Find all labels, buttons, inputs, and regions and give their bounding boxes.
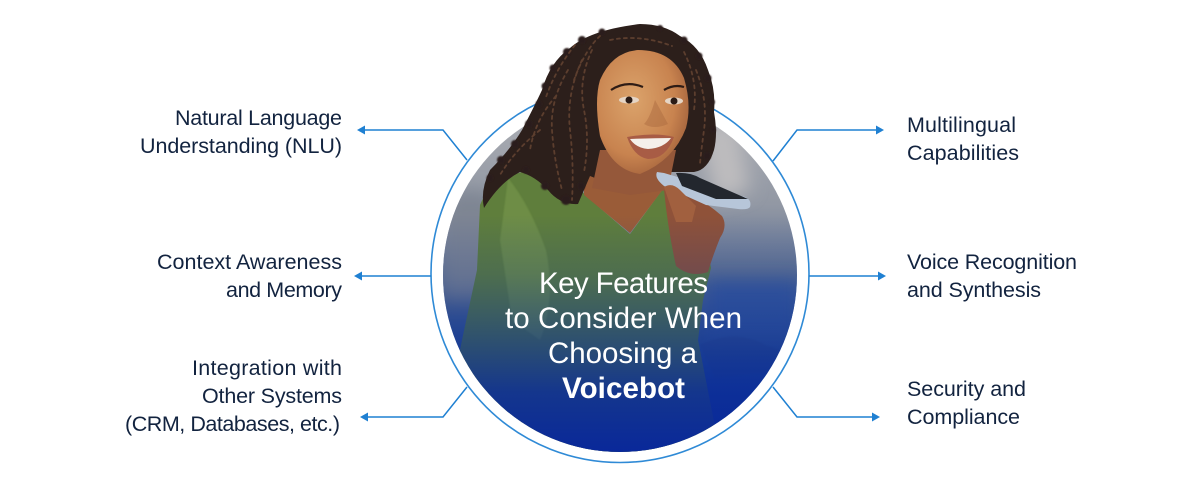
label: context awareness and memory <box>157 250 342 302</box>
connector arrow: voice recognition <box>809 272 886 280</box>
label: context awareness and memory: Context Awareness <box>157 250 342 274</box>
connector arrow: natural language understanding <box>357 126 467 160</box>
photo circle <box>443 126 797 452</box>
label: context awareness and memory: and Memory <box>226 278 342 302</box>
title: to Consider When <box>505 302 742 335</box>
title: Choosing a <box>548 337 698 370</box>
photo background <box>443 98 797 452</box>
phone <box>656 172 750 209</box>
green shirt <box>460 172 714 452</box>
resting hand <box>769 366 772 370</box>
raised hand <box>664 190 725 274</box>
title <box>505 267 742 405</box>
sofa shapes <box>440 120 800 340</box>
eyes <box>619 96 683 104</box>
label: multilingual capabilities: Multilingual <box>907 113 1016 137</box>
nose <box>644 100 668 127</box>
shirt shading <box>500 180 550 318</box>
label: security and compliance: Compliance <box>907 405 1020 429</box>
label: voice recognition and synthesis: and Synthesis <box>907 278 1041 302</box>
label: natural language understanding <box>140 106 342 158</box>
curly hair edge <box>486 25 716 205</box>
woman head and hair <box>483 24 750 222</box>
title: Voicebot <box>562 372 685 405</box>
eyebrows <box>611 84 684 90</box>
smile <box>627 134 674 159</box>
fingers <box>664 185 696 222</box>
label: security and compliance: Security and <box>907 377 1026 401</box>
label: security and compliance <box>907 377 1026 429</box>
label: voice recognition and synthesis <box>907 250 1077 302</box>
label: integration with other systems: Other Systems <box>202 384 342 408</box>
connector arrow: integration <box>360 387 467 422</box>
hair highlights <box>500 36 705 200</box>
bottom gradient overlay <box>443 210 797 455</box>
label: multilingual capabilities <box>907 113 1019 165</box>
label: multilingual capabilities: Capabilities <box>907 141 1019 165</box>
label: natural language understanding: Natural Language <box>175 106 342 130</box>
label: natural language understanding: Understanding (NLU) <box>140 134 342 158</box>
neck <box>584 176 662 233</box>
label: integration with other systems: (CRM, Databases, etc.) <box>125 412 340 436</box>
label: integration with other systems <box>125 356 342 436</box>
connector arrow: context awareness <box>354 272 431 280</box>
title: Key Features <box>539 267 708 300</box>
outer ring <box>431 84 809 462</box>
label: integration with other systems: Integration with <box>192 356 342 380</box>
face <box>597 50 689 174</box>
connector arrow: security <box>773 387 880 422</box>
infographic <box>126 24 1076 464</box>
hair mass <box>483 24 716 208</box>
neck upper <box>592 150 676 195</box>
label: voice recognition and synthesis: Voice Recognition <box>907 250 1077 274</box>
connector arrow: multilingual <box>773 126 884 161</box>
